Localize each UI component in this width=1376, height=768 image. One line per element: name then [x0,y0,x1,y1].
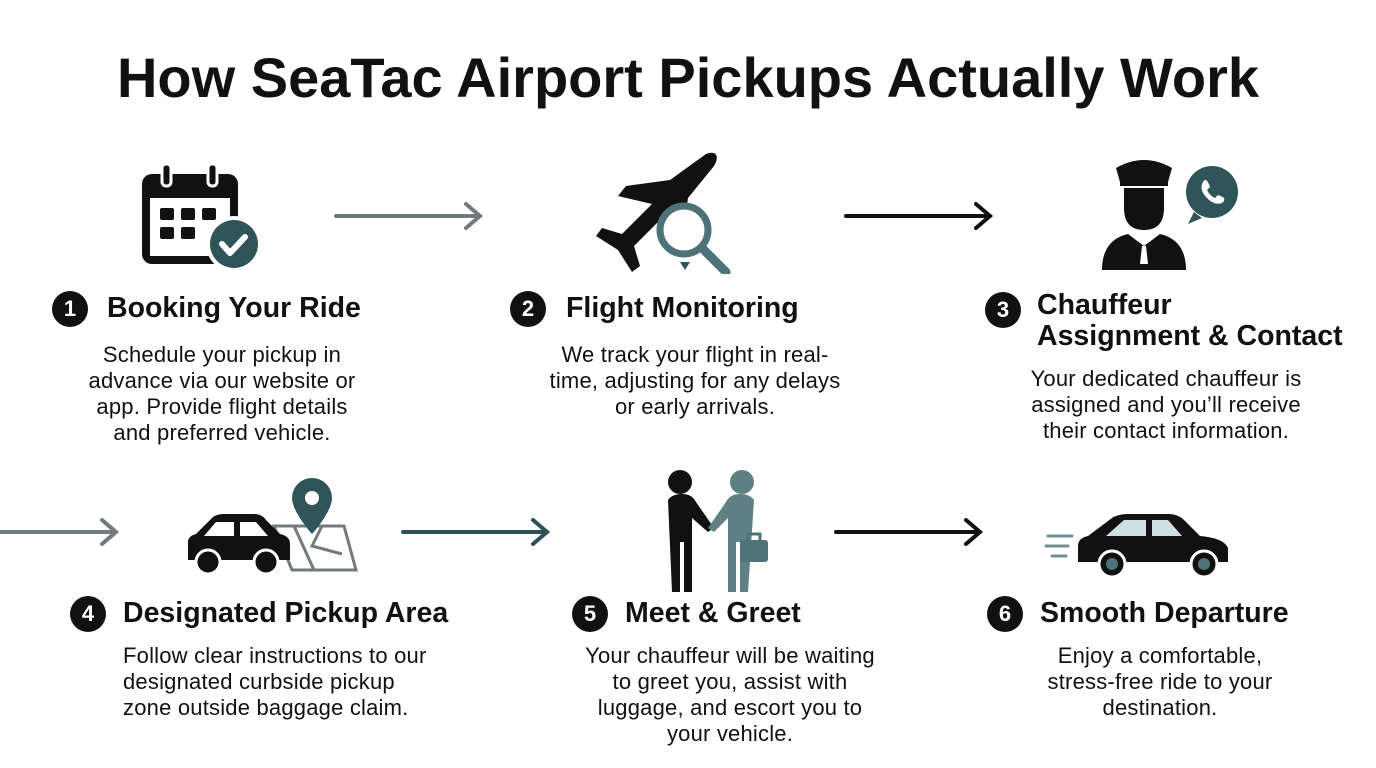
step 6 text: Enjoy a comfortable, [1058,643,1262,668]
step 3 heading [985,289,1343,352]
step 2 text [550,342,840,419]
arrow 2 [844,202,993,230]
step 5 text: to greet you, assist with [613,669,847,694]
step 1 heading: Booking Your Ride [107,292,361,324]
step 4 text: Follow clear instructions to our [123,643,427,668]
step 6 heading: Smooth Departure [1040,597,1289,629]
step 4 text [123,643,427,720]
step 5 heading: 5 [584,601,596,626]
step 3 text [1031,366,1301,443]
step 1 text: advance via our website or [89,368,355,393]
step 5 text: Your chauffeur will be waiting [585,643,875,668]
icon: handshake [668,470,768,592]
icon: chauffeur [1102,160,1238,270]
title: How SeaTac Airport Pickups Actually Work [117,46,1259,109]
step 1 text [89,342,355,445]
step 4 text: designated curbside pickup [123,669,395,694]
arrow 5 [834,518,983,546]
step 3 text: assigned and you’ll receive [1031,392,1301,417]
step 1 text: Schedule your pickup in [103,342,341,367]
step 2 text: We track your flight in real- [561,342,829,367]
step 4 heading: Designated Pickup Area [123,597,448,629]
icon: car departing [1044,514,1228,576]
step 5 text [585,643,875,746]
step 6 heading: 6 [999,601,1011,626]
arrow 3 [0,518,119,546]
step 4 text: zone outside baggage claim. [123,695,408,720]
step 3 text: Your dedicated chauffeur is [1031,366,1301,391]
step 1 text: app. Provide flight details [96,394,348,419]
step 5 heading: Meet & Greet [625,597,801,629]
step 6 text: destination. [1103,695,1217,720]
step 6 text [1048,643,1272,720]
step 5 heading [572,596,801,632]
step 3 text: their contact information. [1043,418,1289,443]
step 2 text: time, adjusting for any delays [550,368,840,393]
step 5 text: your vehicle. [667,721,793,746]
step 4 heading: 4 [82,601,94,626]
step 3 heading: 3 [997,297,1009,322]
step 1 heading: 1 [64,296,76,321]
step 6 text: stress-free ride to your [1048,669,1272,694]
step 5 text: luggage, and escort you to [598,695,862,720]
icon: plane with magnifier [596,152,730,274]
step 1 text: and preferred vehicle. [113,420,331,445]
arrow 4 [401,518,550,546]
step 3 heading: Chauffeur [1037,289,1172,321]
icon: calendar [142,166,258,268]
step 2 heading: Flight Monitoring [566,292,799,324]
step 2 heading: 2 [522,296,534,321]
icon: car and map pin [188,478,358,572]
step 2 text: or early arrivals. [615,394,775,419]
arrow 1 [334,202,483,230]
step 3 heading: Assignment & Contact [1037,320,1343,352]
